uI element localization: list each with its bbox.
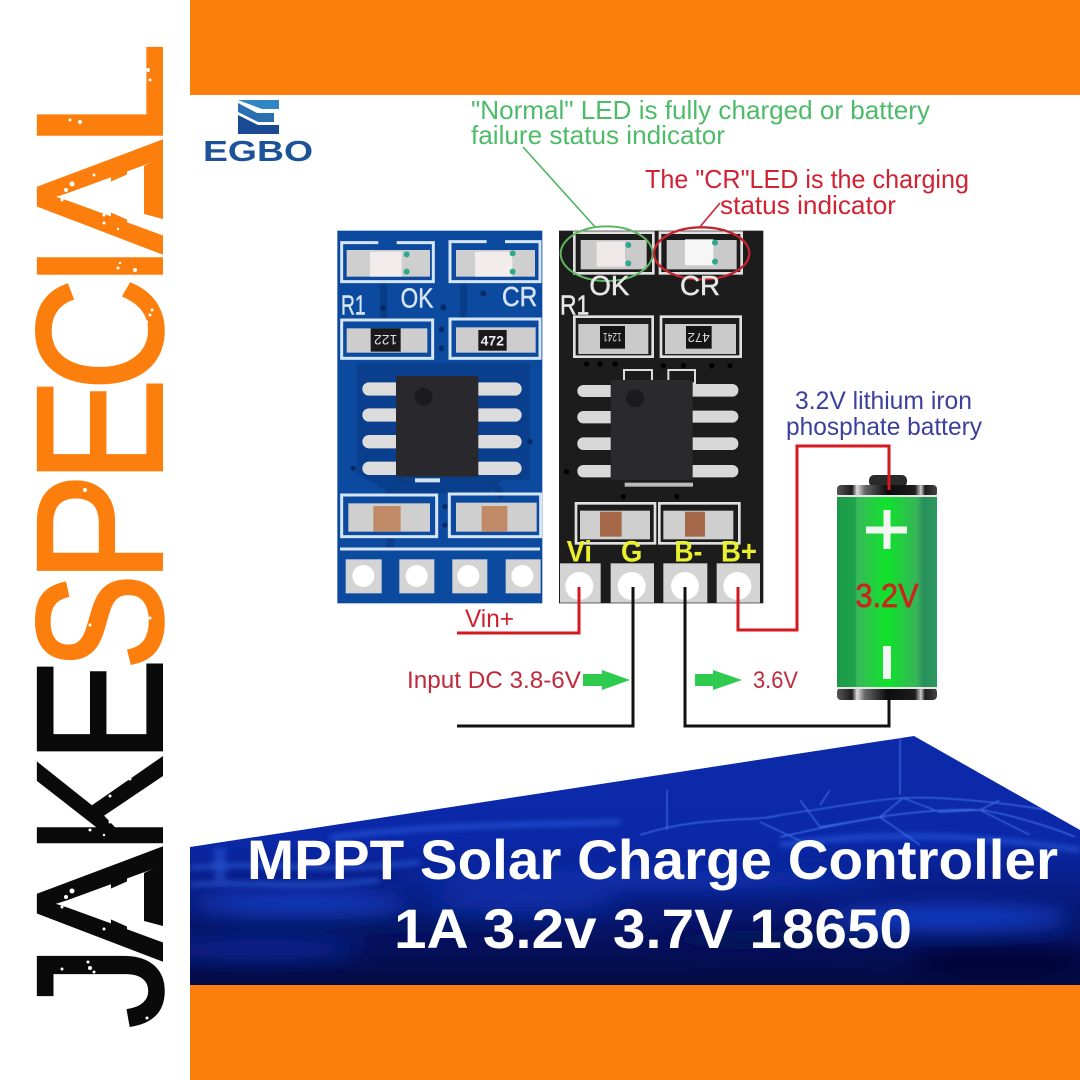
label: battery type: [786, 387, 982, 441]
wordmark part: JAKE: A: [0, 847, 200, 960]
solder pads: [560, 563, 760, 603]
callout: CR LED: [645, 164, 969, 220]
wire: battery negative black: [685, 587, 889, 726]
panel: blue PCB: [337, 231, 542, 603]
pin labels: B-: [674, 536, 702, 569]
vertical brand wordmark: JAKE SPECIAL: [0, 42, 200, 1028]
battery voltage: 3.2V: [856, 577, 918, 614]
logo wordmark: EGBO: [203, 136, 313, 168]
resistors: 472: [481, 332, 504, 348]
bottom orange bar: [190, 985, 1080, 1080]
wordmark part: SPECIAL: L: [0, 42, 200, 150]
callout: Normal LED: [471, 95, 930, 150]
indicator ring: OK: [561, 226, 653, 281]
pin labels: Vi: [567, 536, 592, 569]
banner title: 1A 3.2v 3.7V 18650: [394, 897, 912, 960]
resistors: [342, 319, 540, 358]
banner title: MPPT Solar Charge Controller: [247, 828, 1058, 891]
battery plus sign: [866, 510, 907, 549]
battery: [837, 475, 937, 700]
resistors: 1241: [603, 330, 622, 344]
silkscreen labels: CR: [680, 270, 720, 301]
wordmark part: SPECIAL: P: [0, 473, 200, 583]
resistors: [574, 317, 741, 357]
resistors: 472: [688, 330, 710, 345]
silkscreen labels: R1: [341, 289, 366, 320]
wordmark part: SPECIAL: S: [0, 574, 200, 670]
wire: ground black: [457, 587, 633, 726]
silkscreen labels: CR: [502, 281, 537, 312]
wire: battery positive red: [738, 446, 889, 630]
LEDs: [574, 233, 742, 273]
silkscreen labels: OK: [589, 270, 630, 301]
label: input voltage: Input DC 3.8-6V: [407, 667, 582, 694]
title banner: [160, 736, 1080, 986]
leader line: Normal LED: [523, 147, 596, 228]
label: Vin+: Vin+: [465, 605, 514, 633]
label: battery type: phosphate battery: [786, 413, 982, 441]
wordmark part: JAKE: J: [0, 945, 200, 1028]
label: battery type: 3.2V lithium iron: [795, 387, 972, 415]
wordmark part: JAKE: E: [0, 658, 200, 763]
arrow: input: [583, 670, 630, 690]
indicator ring: CR: [654, 227, 749, 279]
wordmark part: SPECIAL: I: [0, 244, 200, 288]
callout: CR LED: The "CR"LED is the charging: [645, 164, 969, 194]
silkscreen labels: [341, 281, 537, 320]
wordmark part: JAKE: [0, 658, 200, 1028]
battery top cap: [837, 485, 937, 497]
battery minus sign: [883, 646, 891, 679]
vias: [564, 361, 733, 499]
pin labels: G: [621, 536, 642, 569]
pin labels: [567, 536, 757, 569]
wire: Vin+ red: [457, 587, 579, 633]
panel: black PCB: [559, 226, 763, 603]
wordmark part: SPECIAL: A: [0, 140, 200, 253]
solder pads: [346, 559, 541, 593]
logo icon: [238, 100, 279, 134]
silkscreen labels: R1: [560, 289, 589, 320]
banner background: [160, 736, 1080, 986]
leader line: CR LED: [699, 203, 720, 228]
arrow: output: [695, 670, 742, 690]
callout: Normal LED: "Normal" LED is fully charged or battery: [471, 95, 930, 125]
pin labels: B+: [721, 536, 757, 569]
wordmark part: SPECIAL: C: [0, 278, 200, 391]
top orange bar: [190, 0, 1080, 95]
capacitors: [576, 503, 739, 543]
silkscreen labels: [560, 270, 720, 320]
resistors: 122: [374, 332, 397, 348]
wordmark part: JAKE: K: [0, 757, 200, 854]
callout: CR LED: status indicator: [720, 190, 896, 220]
LEDs: [342, 242, 540, 282]
battery bottom cap: [837, 688, 937, 700]
wordmark part: SPECIAL: [0, 42, 200, 670]
capacitors: [342, 494, 541, 537]
battery terminal: [869, 475, 907, 487]
battery body: [837, 496, 937, 689]
logo: EGBO: [203, 100, 313, 168]
IC chip: [362, 376, 522, 482]
wordmark part: SPECIAL: E: [0, 378, 200, 483]
callout: Normal LED: failure status indicator: [471, 120, 725, 150]
IC chip: [577, 370, 738, 487]
label: output voltage: 3.6V: [753, 667, 799, 694]
banner title: [247, 828, 1058, 960]
silkscreen labels: OK: [401, 283, 434, 314]
